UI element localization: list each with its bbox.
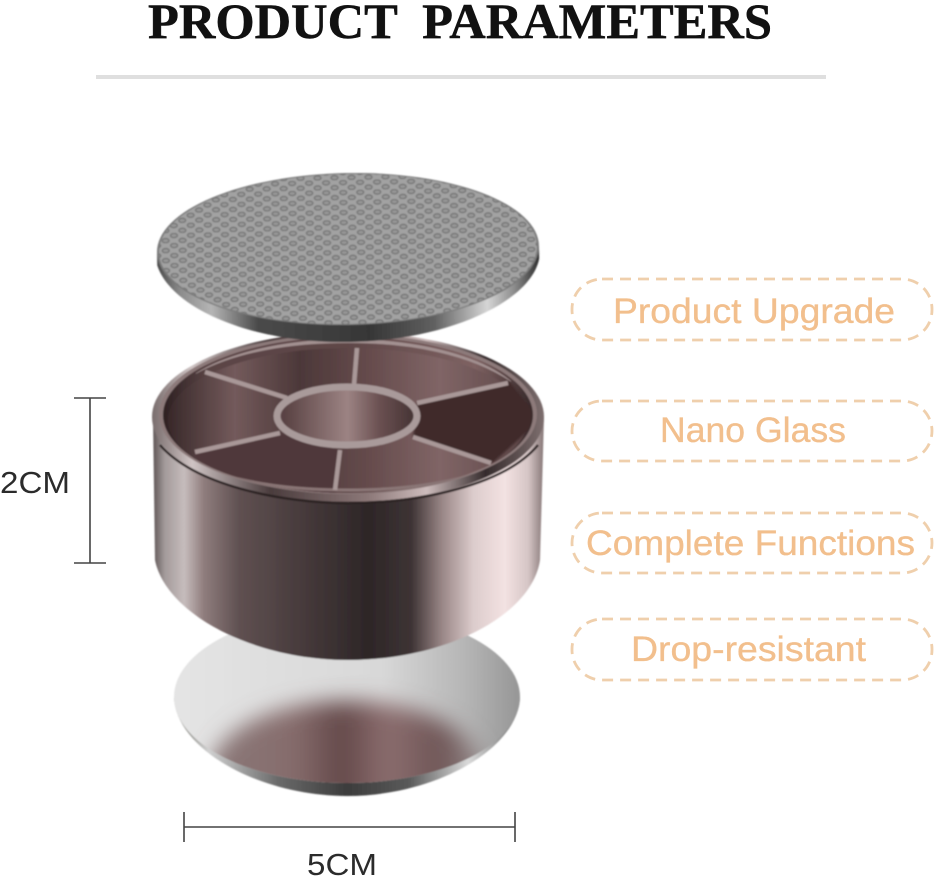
feature pill: Complete Functions xyxy=(572,513,932,573)
inner cavity wall xyxy=(159,334,537,494)
dimension: width 5CM xyxy=(184,812,515,879)
feature pill: Drop-resistant xyxy=(572,619,932,680)
divider spokes xyxy=(195,348,508,490)
top plate with mesh xyxy=(156,170,541,345)
bottom plate xyxy=(174,635,521,798)
feature pill: Drop-resistant: Drop-resistant xyxy=(631,630,866,669)
feature pill: Complete Functions: Complete Functions xyxy=(586,524,915,563)
dimension: height 2CM xyxy=(0,398,106,563)
feature pill: Nano Glass xyxy=(572,401,932,461)
feature pill: Nano Glass: Nano Glass xyxy=(660,411,846,450)
centre ring xyxy=(277,387,417,445)
feature pill: Product Upgrade xyxy=(572,279,932,340)
outer rim xyxy=(152,332,544,502)
title underline xyxy=(96,75,826,79)
front rim shadow line xyxy=(160,445,538,503)
cavity compartments xyxy=(168,341,540,500)
feature pill: Product Upgrade: Product Upgrade xyxy=(613,292,895,331)
dimension: height 2CM: 2CM xyxy=(0,465,70,500)
cylinder body xyxy=(152,332,544,660)
product illustration: exploded magnetic mount xyxy=(152,170,544,849)
